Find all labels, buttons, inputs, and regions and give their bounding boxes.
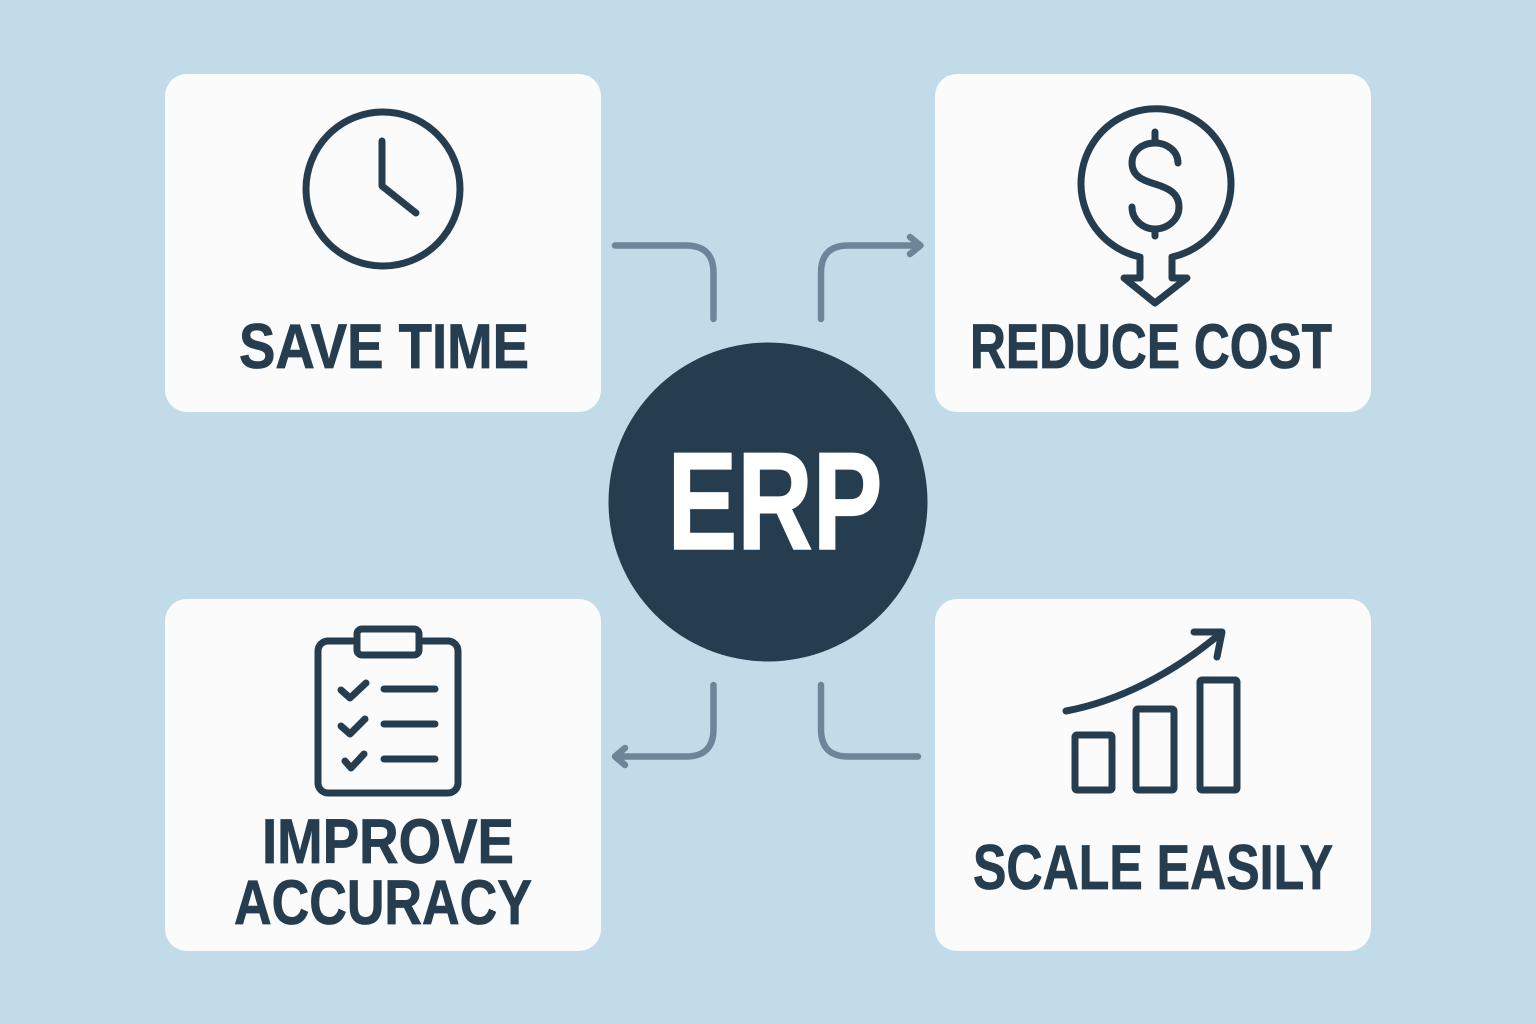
heading: reduce cost: REDUCE COST — [970, 312, 1332, 382]
panel: scale easily — [935, 599, 1371, 951]
panel: improve accuracy — [165, 599, 601, 951]
icon: dollar with down arrow — [1081, 109, 1231, 303]
panel: save time — [165, 74, 601, 412]
icon: growth bar chart — [1066, 632, 1237, 790]
icon: clock — [306, 112, 460, 266]
arrow: save time connector — [615, 246, 714, 319]
icon: clipboard checklist — [318, 629, 458, 793]
heading: improve accuracy: IMPROVE — [262, 807, 514, 877]
arrow: to reduce cost — [821, 237, 920, 319]
arrow: scale easily connector — [821, 685, 918, 756]
panel: improve accuracy: ACCURACY — [234, 868, 532, 938]
arrow: to improve accuracy — [615, 685, 714, 765]
heading: scale easily: SCALE EASILY — [973, 833, 1333, 903]
center circle: ERP — [608, 342, 928, 662]
heading: save time: SAVE TIME — [239, 312, 529, 382]
panel: reduce cost — [935, 74, 1371, 412]
center circle: ERP: ERP — [668, 424, 882, 579]
